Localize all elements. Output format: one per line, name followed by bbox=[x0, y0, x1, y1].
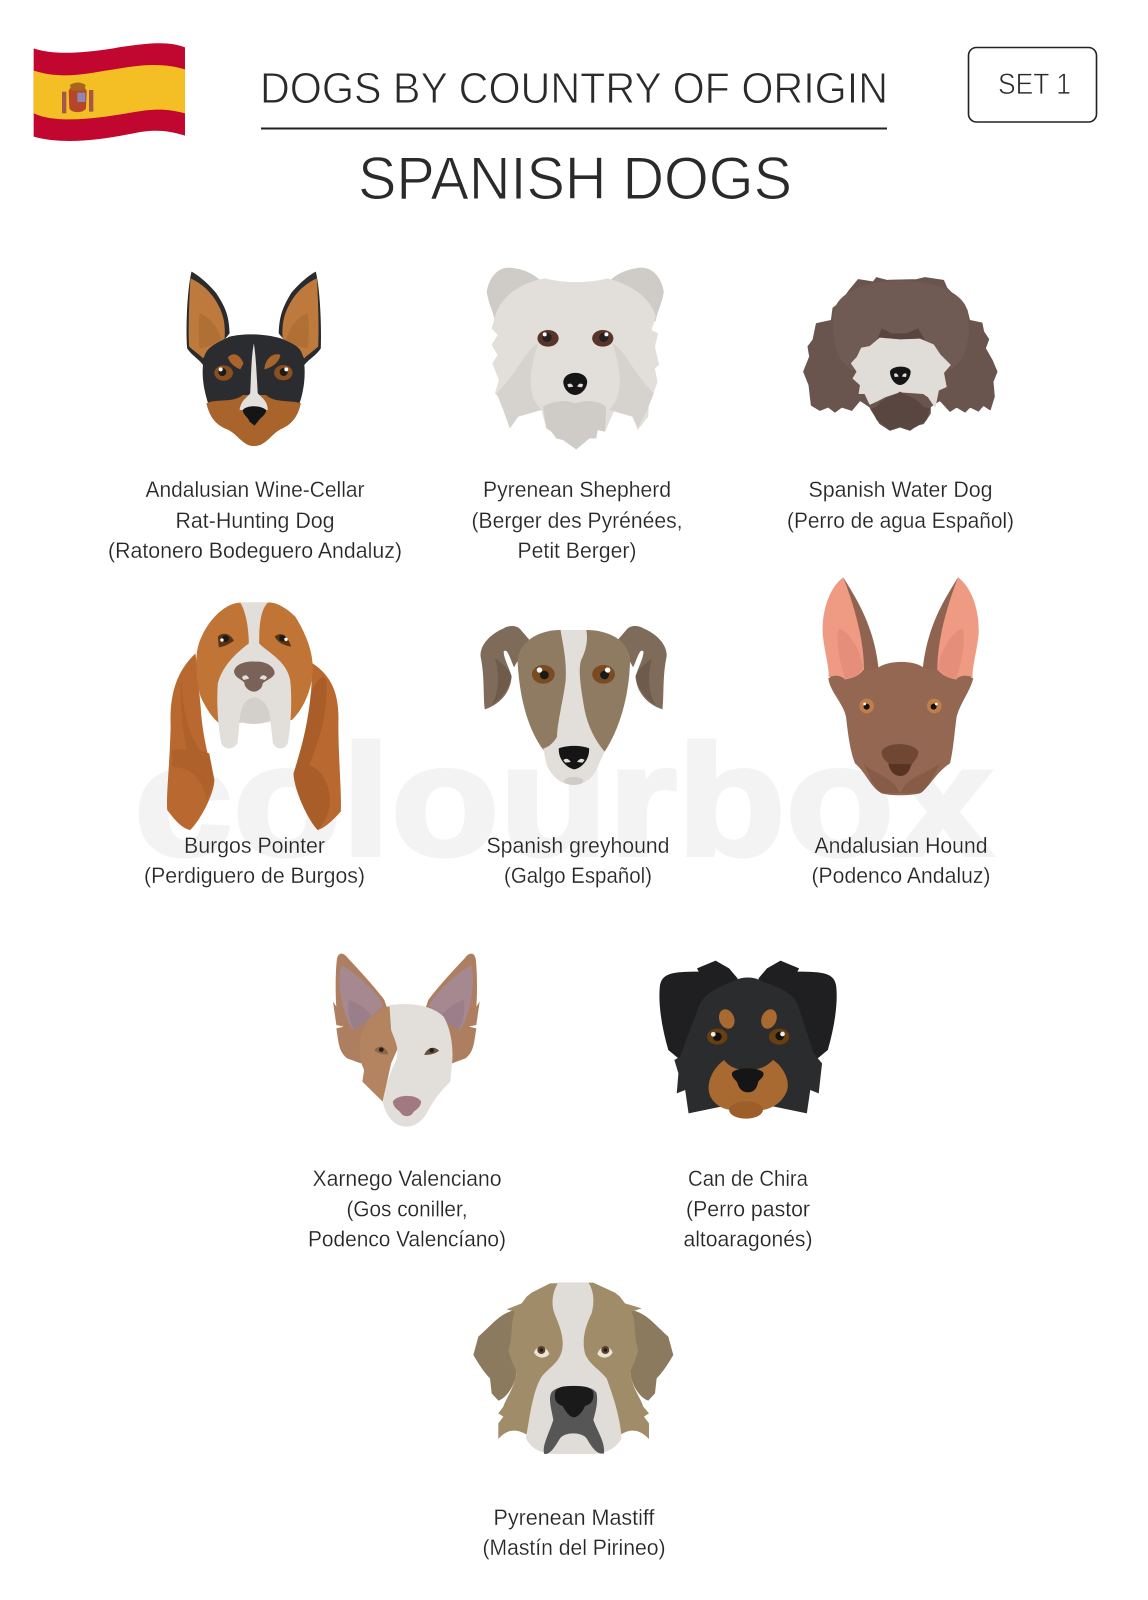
label: (Galgo Español) bbox=[504, 863, 652, 888]
label: Spanish Water Dog bbox=[808, 477, 992, 502]
icon: mastiff head bbox=[473, 1282, 673, 1454]
panel: Spanish Water Dog bbox=[787, 278, 1014, 533]
label: Petit Berger) bbox=[518, 538, 636, 563]
title: DOGS BY COUNTRY OF ORIGIN bbox=[260, 64, 888, 113]
watermark: colourbox bbox=[134, 713, 993, 889]
icon: hound head bbox=[823, 577, 979, 795]
label: (Berger des Pyrénées, bbox=[472, 508, 682, 533]
label bbox=[486, 833, 670, 888]
label: Can de Chira bbox=[688, 1166, 808, 1191]
label: (Mastín del Pirineo) bbox=[482, 1535, 666, 1560]
icon: ratonero head bbox=[187, 272, 321, 446]
panel: Pyrenean Shepherd bbox=[472, 268, 682, 563]
label bbox=[108, 477, 402, 563]
label bbox=[308, 1166, 506, 1252]
label: Pyrenean Shepherd bbox=[483, 477, 671, 502]
set badge bbox=[968, 48, 1096, 122]
label: (Perdiguero de Burgos) bbox=[144, 863, 365, 888]
label bbox=[787, 477, 1014, 533]
label bbox=[684, 1166, 812, 1252]
icon: xarnego head bbox=[333, 954, 480, 1127]
panel: Spanish greyhound bbox=[481, 626, 670, 888]
icon: chira head bbox=[659, 961, 837, 1119]
label bbox=[812, 833, 990, 888]
subtitle: SPANISH DOGS bbox=[358, 145, 792, 212]
label: (Ratonero Bodeguero Andaluz) bbox=[108, 538, 402, 563]
label: Spanish greyhound bbox=[486, 833, 670, 858]
panel: Andalusian Hound bbox=[812, 577, 990, 888]
label: (Podenco Andaluz) bbox=[812, 863, 990, 888]
icon: pointer head bbox=[167, 603, 341, 830]
label bbox=[144, 833, 365, 888]
panel: Burgos Pointer bbox=[144, 603, 365, 888]
icon: Spanish flag bbox=[34, 43, 185, 141]
label: (Perro pastor bbox=[686, 1196, 810, 1222]
panel: Can de Chira bbox=[659, 961, 837, 1252]
label: (Gos coniller, bbox=[346, 1196, 468, 1222]
panel: Andalusian Wine-Cellar Rat-Hunting Dog bbox=[108, 272, 402, 563]
panel: Pyrenean Mastiff bbox=[473, 1282, 673, 1560]
icon: shepherd head bbox=[487, 268, 664, 449]
label: Burgos Pointer bbox=[184, 833, 325, 858]
label: Xarnego Valenciano bbox=[312, 1166, 502, 1191]
label: Andalusian Wine-Cellar bbox=[146, 477, 365, 502]
label bbox=[482, 1505, 666, 1560]
set badge: SET 1 bbox=[998, 68, 1071, 101]
label: (Perro de agua Español) bbox=[787, 508, 1014, 533]
icon: water dog head bbox=[804, 278, 997, 430]
panel: Xarnego Valenciano bbox=[308, 954, 506, 1252]
label: Andalusian Hound bbox=[814, 833, 988, 858]
label bbox=[472, 477, 682, 563]
label: Rat-Hunting Dog bbox=[176, 508, 334, 533]
label: Podenco Valencíano) bbox=[308, 1226, 506, 1252]
icon: greyhound head bbox=[481, 626, 667, 785]
label: Pyrenean Mastiff bbox=[494, 1505, 655, 1530]
label: altoaragonés) bbox=[684, 1226, 812, 1252]
